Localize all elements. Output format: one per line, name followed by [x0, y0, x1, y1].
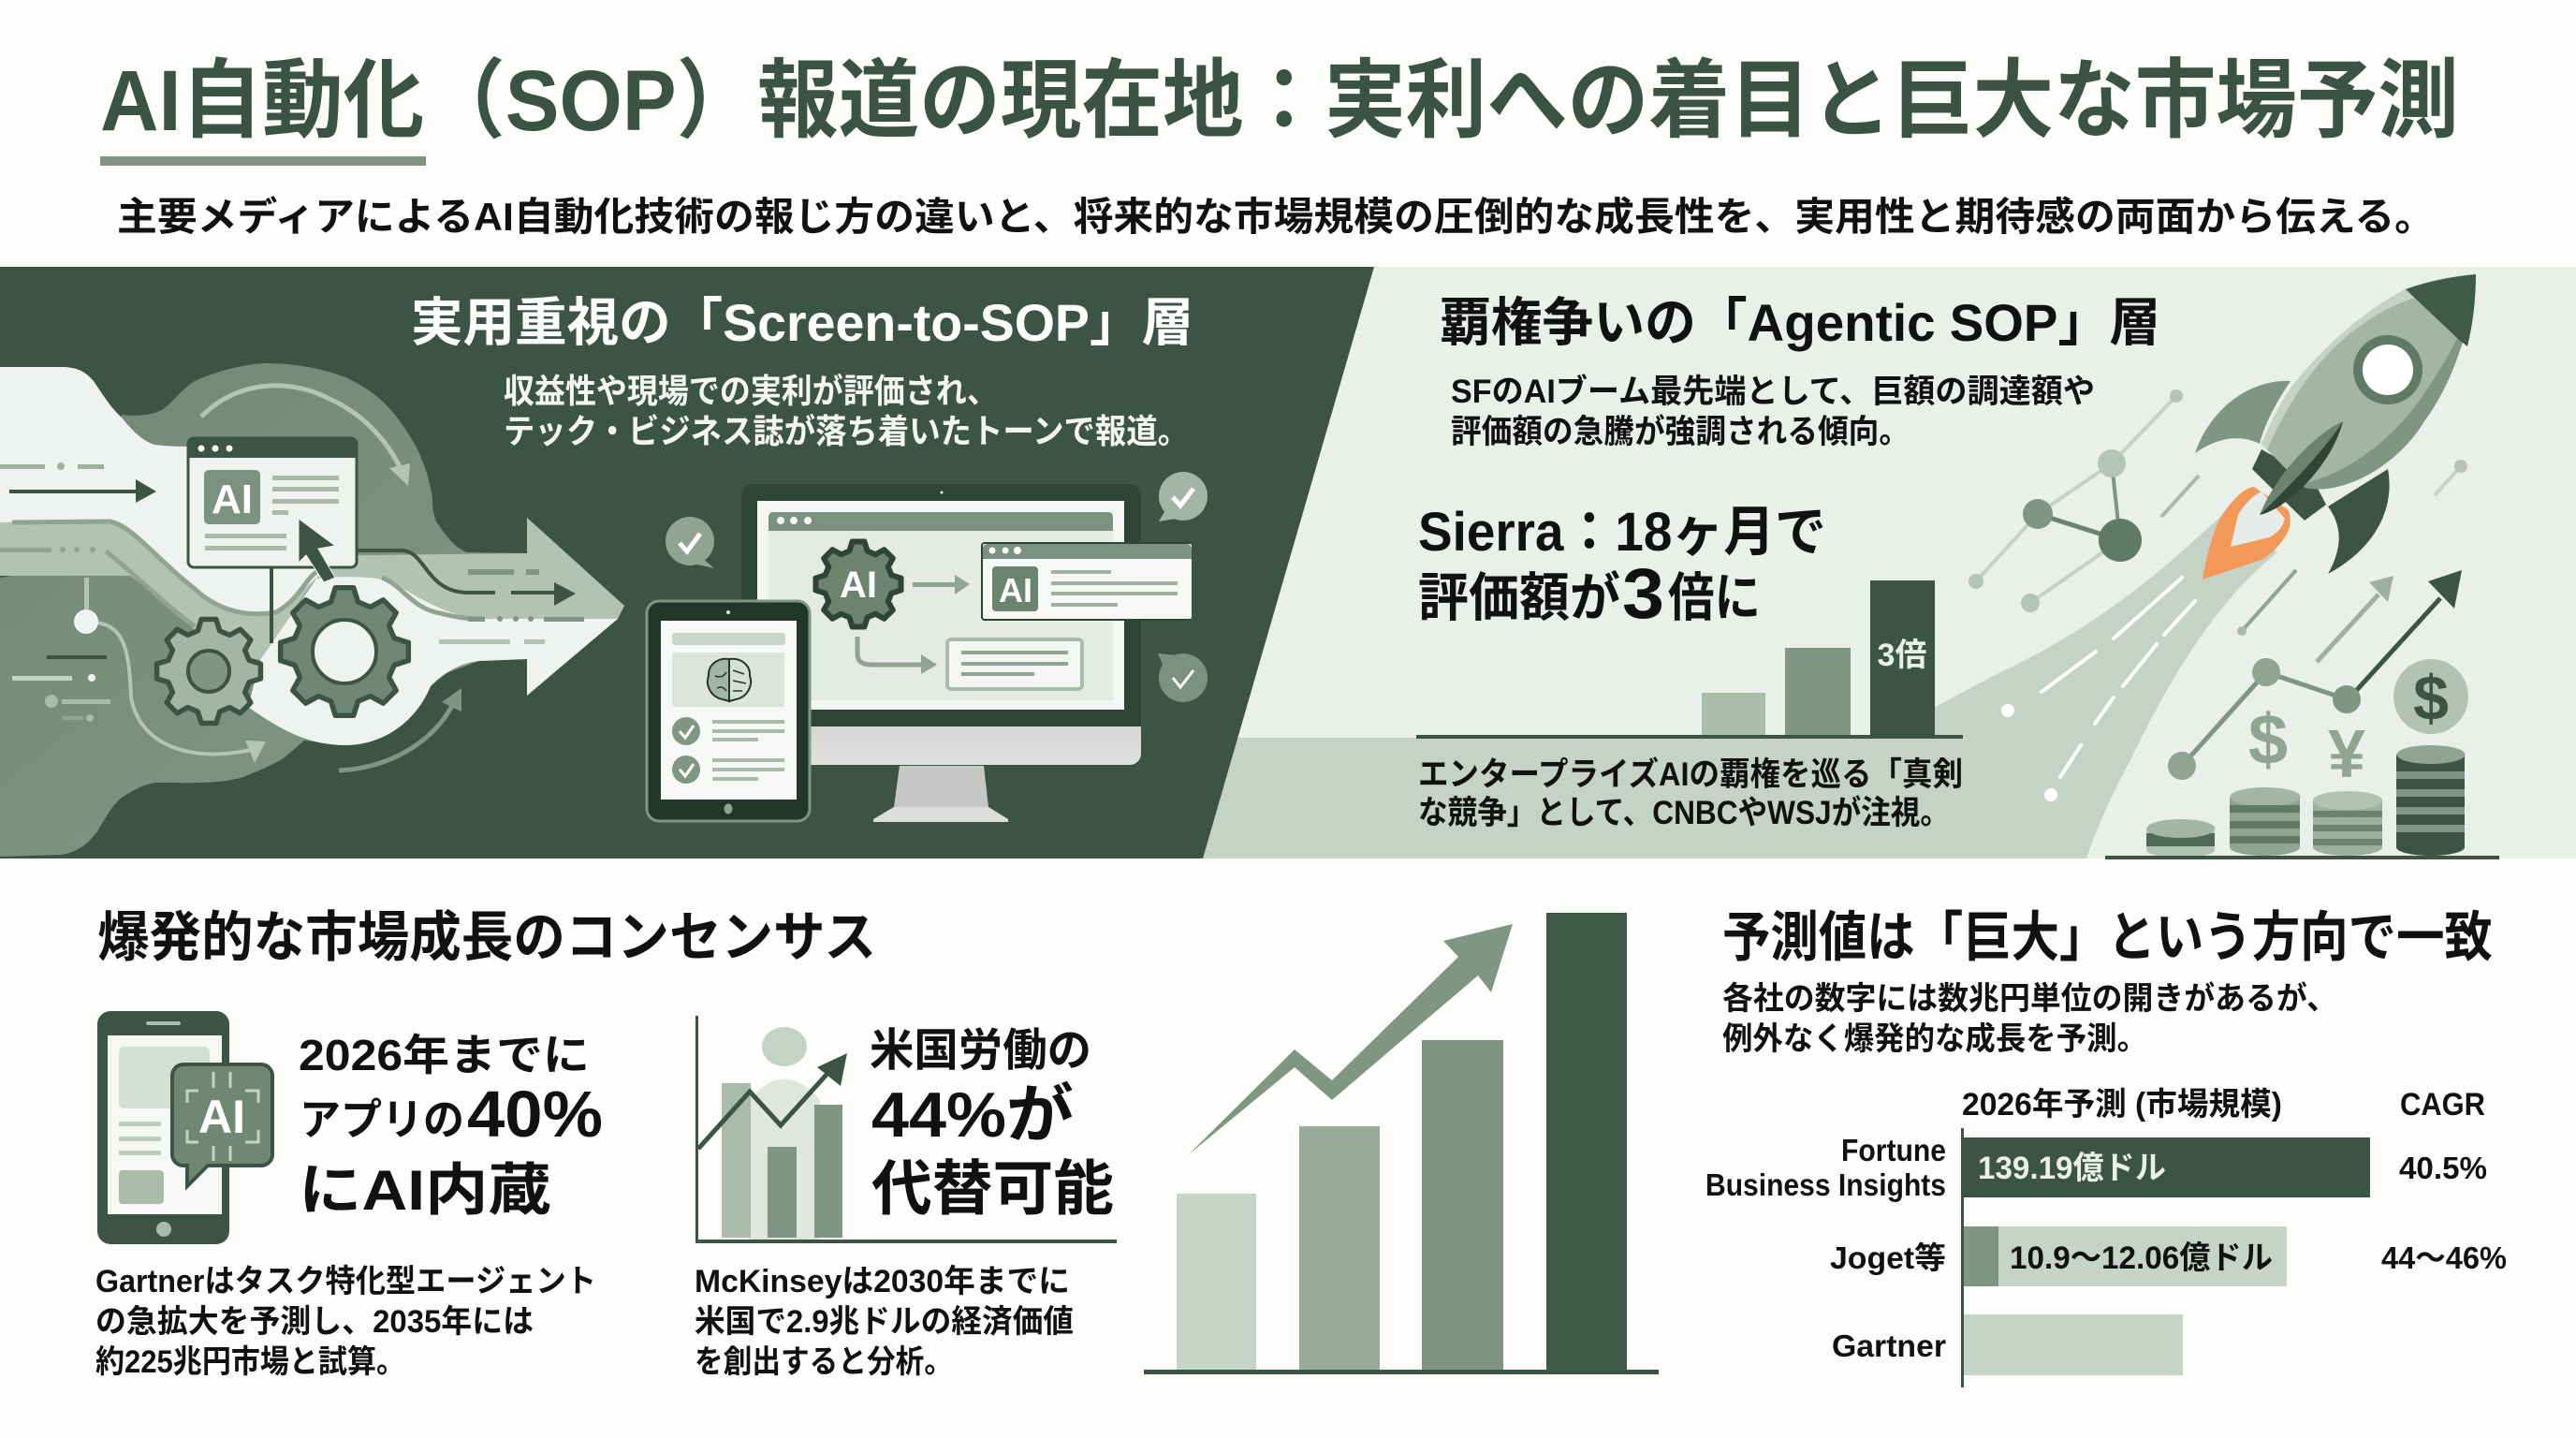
- stat: 40%: [299, 1031, 603, 1222]
- text: enterprise competition: [1418, 756, 1963, 831]
- stat: 44%: 米国労働の: [870, 1026, 1091, 1076]
- description: Agentic SOP: 評価額の急騰が強調される傾向。: [1451, 414, 1910, 450]
- table headers: 2026年予測 (市場規模): [1962, 1087, 2282, 1123]
- table headers: CAGR: [2400, 1087, 2485, 1123]
- icon: currency symbols: $: [2248, 700, 2288, 780]
- icon: tablet: [647, 601, 810, 821]
- chart: rising bars with arrow: [1144, 913, 1659, 1374]
- text: enterprise competition: エンタープライズAIの覇権を巡る「真剣: [1418, 756, 1963, 793]
- stat: 40%: 2026年までに: [299, 1031, 590, 1079]
- icon: gears: [157, 588, 408, 723]
- icon: browser window with cursor: AI: [212, 477, 253, 522]
- panel: Agentic SOP background: [1123, 267, 2576, 858]
- flow graphic: [0, 363, 624, 857]
- stat: Sierra: 評価額が: [1418, 568, 1620, 627]
- stat: Sierra: Sierra：18ヶ月で: [1418, 502, 1826, 563]
- stat: 44%: 代替可能: [871, 1155, 1114, 1223]
- description: テック・ビジネス誌が落ち着いたトーンで報道。: [504, 412, 1189, 450]
- CAGR values: 44〜46%: [2381, 1240, 2507, 1275]
- title: AI自動化（SOP）報道の現在地：実利への着目と巨大な市場予測: [100, 53, 2459, 149]
- text: enterprise competition: な競争」として、CNBCやWSJが注視。: [1418, 795, 1950, 831]
- panel: Screen-to-SOP: [0, 267, 1374, 858]
- text: McKinsey description: を創出すると分析。: [695, 1344, 953, 1380]
- text: Gartner description: Gartnerはタスク特化型エージェント: [95, 1264, 596, 1299]
- icon: monitor: AI: [999, 571, 1032, 609]
- text: McKinsey description: [695, 1264, 1074, 1380]
- text: McKinsey description: 米国で2.9兆ドルの経済価値: [695, 1304, 1074, 1340]
- icon: check bubbles: [666, 472, 1208, 702]
- bar chart: market size forecast: 139.19億ドル: [1978, 1151, 2166, 1186]
- stat: 44%: 44%が: [871, 1079, 1074, 1151]
- stat: Sierra: 3: [1622, 554, 1664, 634]
- text: Gartner description: の急拡大を予測し、2035年には: [95, 1304, 534, 1340]
- icon: monitor: [741, 484, 1192, 822]
- text: Gartner description: 約225兆円市場と試算。: [95, 1344, 405, 1380]
- heading: market consensus: 爆発的な市場成長のコンセンサス: [97, 907, 876, 968]
- text: McKinsey description: McKinseyは2030年までに: [695, 1264, 1070, 1299]
- bar chart: market size forecast: [1961, 1128, 2370, 1387]
- text: Gartner description: [95, 1264, 596, 1380]
- icon: browser window with cursor: [187, 437, 357, 582]
- heading: Agentic SOP: 覇権争いの「Agentic SOP」層: [1440, 293, 2160, 352]
- icon: currency symbols: ¥: [2328, 717, 2365, 792]
- description: Agentic SOP: SFのAIブーム最先端として、巨額の調達額や: [1451, 373, 2095, 410]
- graphic: trail dashes: [2001, 578, 2195, 801]
- icon: currency symbols: $: [2413, 663, 2449, 734]
- icon: coin stacks: [2105, 745, 2499, 859]
- icon: rocket: [2195, 274, 2476, 580]
- stat: 40%: 40%: [467, 1078, 603, 1151]
- icon: phone with AI bubble: AI: [198, 1091, 245, 1143]
- bar chart: market size forecast: 10.9〜12.06億ドル: [2010, 1240, 2273, 1276]
- CAGR values: [2381, 1151, 2507, 1275]
- row labels: Fortune: [1841, 1133, 1946, 1167]
- icon: phone with AI bubble: [97, 1011, 272, 1244]
- CAGR values: 40.5%: [2399, 1151, 2487, 1185]
- graphic: network nodes: [1969, 389, 2467, 612]
- stat: 44%: [870, 1026, 1114, 1223]
- bar chart: valuation 3x: 3倍: [1878, 638, 1926, 673]
- description: forecasts: 各社の数字には数兆円単位の開きがあるが、: [1722, 980, 2337, 1017]
- description: [504, 372, 1189, 450]
- heading: forecasts: 予測値は「巨大」という方向で一致: [1722, 907, 2493, 968]
- table headers: [1962, 1087, 2485, 1123]
- subtitle: 主要メディアによるAI自動化技術の報じ方の違いと、将来的な市場規模の圧倒的な成長性を、実用性と期待感の両面から伝える。: [117, 195, 2435, 239]
- bar chart: valuation 3x: [1416, 580, 1963, 739]
- stat: Sierra: [1418, 502, 1826, 634]
- description: forecasts: [1722, 980, 2337, 1057]
- stat: 40%: にAI内蔵: [299, 1159, 551, 1222]
- description: 収益性や現場での実利が評価され、: [504, 372, 998, 410]
- icon: monitor: AI: [840, 565, 877, 606]
- description: Agentic SOP: [1451, 373, 2095, 450]
- icon: currency symbols: [2248, 659, 2468, 792]
- graphic: growth arrows: [2168, 570, 2462, 780]
- heading: 実用重視の「Screen-to-SOP」層: [411, 293, 1193, 352]
- row labels: Business Insights: [1705, 1167, 1946, 1202]
- description: forecasts: 例外なく爆発的な成長を予測。: [1722, 1021, 2147, 1057]
- stat: 40%: アプリの: [300, 1095, 464, 1144]
- row labels: Joget等: [1830, 1240, 1946, 1275]
- row labels: Gartner: [1832, 1328, 1946, 1363]
- stat: Sierra: 倍に: [1668, 568, 1761, 627]
- chart: labor replacement: [695, 1016, 1117, 1243]
- row labels: [1705, 1133, 1946, 1363]
- panel background: [0, 267, 1374, 858]
